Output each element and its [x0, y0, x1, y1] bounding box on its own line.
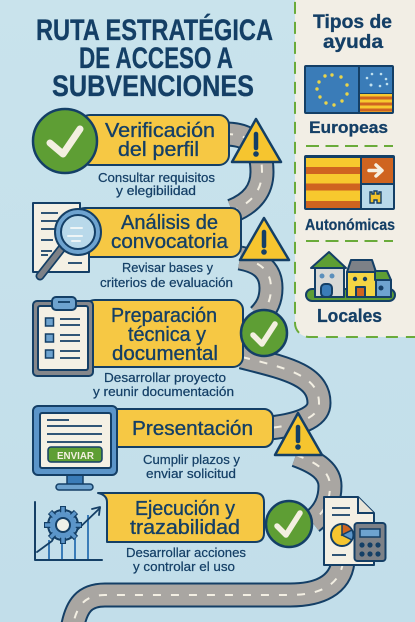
heading: Presentación — [132, 418, 253, 440]
banner — [105, 409, 273, 447]
heading: Preparación — [111, 305, 217, 327]
panel heading — [313, 12, 392, 53]
description: Consultar requisitos — [98, 171, 215, 185]
panel: tipos de ayuda — [295, 0, 415, 337]
heading: documental — [112, 343, 218, 365]
banner — [98, 493, 264, 542]
heading: del perfil — [118, 139, 199, 161]
icon: gear and growth chart — [35, 502, 102, 560]
heading: convocatoria — [111, 231, 229, 253]
icon: warning triangle — [275, 413, 322, 455]
icon: warning triangle — [232, 119, 281, 162]
heading: Análisis de — [121, 212, 218, 234]
step 2: análisis de convocatoria — [33, 203, 289, 290]
banner — [80, 115, 229, 165]
description — [100, 261, 233, 290]
heading — [105, 120, 215, 161]
banner — [85, 300, 243, 367]
icon: document with magnifier — [33, 203, 101, 276]
description: y controlar el uso — [133, 560, 235, 574]
heading — [111, 212, 229, 253]
step 4: presentación — [33, 406, 322, 490]
icon: regional flag — [305, 156, 394, 209]
label: Europeas: Europeas — [309, 118, 388, 137]
heading: técnica y — [128, 324, 206, 346]
icon: warning triangle — [240, 218, 289, 260]
icon: monitor with send button: ENVIAR — [57, 451, 95, 462]
icon: village — [306, 252, 395, 301]
step 5: ejecución y trazabilidad — [35, 493, 312, 574]
heading — [130, 498, 240, 539]
title: DE ACCESO A — [79, 42, 233, 75]
icon: document with pie chart and calculator — [324, 497, 386, 565]
description: Cumplir plazos y — [143, 453, 241, 467]
description: Desarrollar acciones — [126, 546, 246, 560]
title — [36, 13, 273, 103]
icon: clipboard checklist — [33, 297, 93, 376]
heading: trazabilidad — [130, 517, 240, 539]
title: RUTA ESTRATÉGICA — [36, 13, 273, 47]
description: enviar solicitud — [146, 467, 236, 481]
description: y reunir documentación — [93, 385, 234, 399]
heading: Ejecución y — [135, 498, 235, 520]
description: criterios de evaluación — [100, 276, 233, 290]
label: Autonómicas: Autonómicas — [305, 217, 395, 234]
icon: monitor with send button — [33, 406, 117, 490]
icon: green check — [33, 109, 97, 173]
description: Desarrollar proyecto — [104, 371, 226, 385]
step 1: verificación del perfil — [33, 109, 281, 198]
label: Locales: Locales — [317, 306, 382, 326]
title: SUBVENCIONES — [52, 70, 254, 103]
panel heading: ayuda — [323, 32, 383, 53]
road: winding route — [72, 134, 343, 622]
description: Revisar bases y — [122, 261, 214, 275]
step 3: preparación técnica y documental — [33, 297, 287, 399]
panel heading: Tipos de — [313, 12, 392, 33]
description — [98, 171, 215, 198]
description: y elegibilidad — [116, 184, 196, 198]
description — [93, 371, 234, 399]
description — [143, 453, 241, 481]
icon: green check — [266, 501, 312, 547]
icon: european flags — [305, 66, 393, 113]
heading — [111, 305, 218, 365]
icon: green check — [241, 310, 287, 356]
heading: Verificación — [105, 120, 215, 142]
description — [126, 546, 246, 574]
banner — [75, 208, 241, 257]
